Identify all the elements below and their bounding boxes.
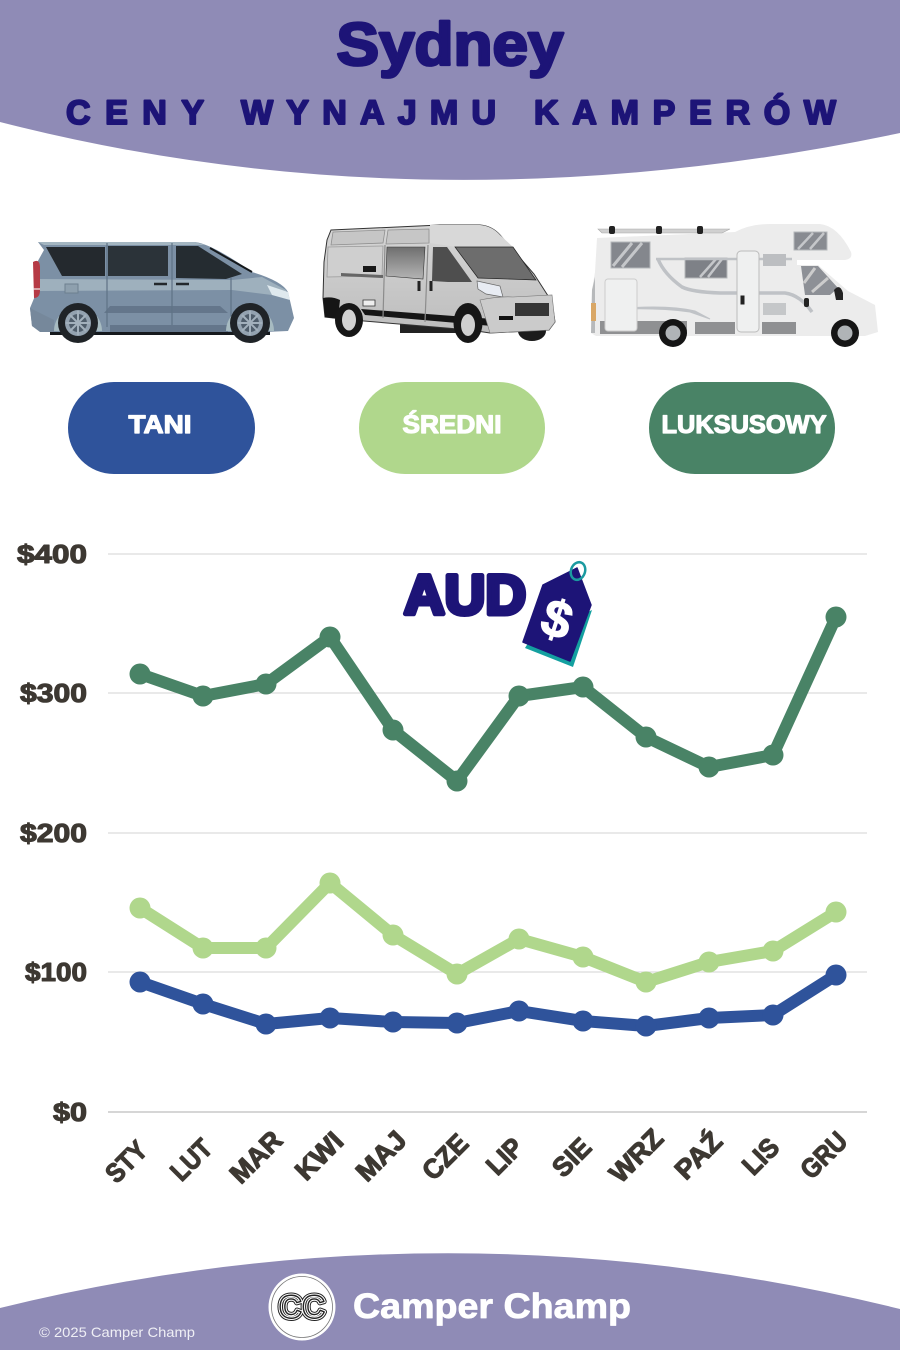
pill: mid: ŚREDNI [402, 409, 502, 439]
x axis labels: LIS [736, 1132, 785, 1181]
x axis labels: LUT [165, 1133, 219, 1187]
y axis labels: $200 [20, 818, 87, 848]
brand name: Camper Champ [353, 1287, 631, 1326]
x axis labels: WRZ [603, 1123, 669, 1189]
pill: luxury: LUKSUSOWY [662, 411, 827, 439]
subtitle: KAMPERÓW [534, 94, 837, 132]
icon: minivan [30, 242, 294, 343]
pill: luxury [649, 382, 835, 474]
header banner [0, 0, 900, 180]
currency label AUD: AUD [404, 563, 526, 626]
x axis labels: LIP [480, 1132, 529, 1181]
icon: price tag [523, 560, 592, 667]
subtitle [66, 94, 837, 132]
line chart [17, 539, 867, 1189]
series: budget [130, 964, 846, 1036]
logo [268, 1274, 336, 1340]
x axis labels: PAŹ [668, 1125, 728, 1185]
y axis labels: $400 [17, 539, 87, 569]
logo: CC [279, 1289, 325, 1325]
icon: motorhome [591, 224, 878, 347]
pill: mid [359, 382, 545, 474]
subtitle: CENY [66, 94, 204, 132]
title: Sydney [336, 11, 564, 78]
x axis labels: MAJ [350, 1125, 412, 1187]
y axis labels: $0 [53, 1097, 87, 1127]
x axis labels: SIE [546, 1132, 597, 1183]
y axis labels [17, 539, 87, 1127]
series: mid [130, 872, 846, 992]
x axis labels: MAR [224, 1125, 288, 1189]
subtitle: WYNAJMU [241, 94, 496, 132]
logo: CC [279, 1289, 325, 1325]
x axis labels: CZE [416, 1128, 474, 1186]
y axis labels: $100 [25, 957, 87, 987]
pill: budget: TANI [128, 411, 192, 439]
series: luxury [130, 606, 846, 792]
pill: budget [68, 382, 255, 474]
x axis labels: STY [100, 1135, 153, 1189]
y axis labels: $300 [20, 678, 87, 708]
x axis labels: KWI [289, 1126, 349, 1186]
x axis labels [100, 1123, 853, 1189]
footer banner [0, 1253, 900, 1350]
copyright: © 2025 Camper Champ [39, 1324, 195, 1340]
x axis labels: GRU [795, 1126, 853, 1185]
icon: price tag: $ [534, 588, 579, 652]
logo: CC [279, 1289, 325, 1325]
icon: van [323, 225, 555, 343]
